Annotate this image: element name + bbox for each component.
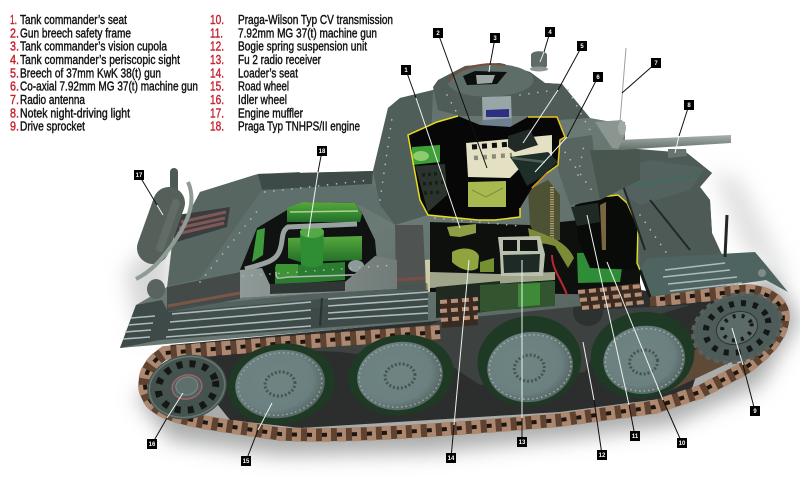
red cables bbox=[552, 255, 567, 295]
legend: parts list 10-18: 11. bbox=[210, 25, 223, 40]
transmission bbox=[577, 252, 622, 283]
legend: parts list 10-18: Engine muffler bbox=[238, 106, 303, 120]
callout 17 leader: 17 bbox=[136, 173, 143, 179]
callout 15 leader: 15 bbox=[243, 459, 250, 465]
olive bulkhead bbox=[528, 180, 560, 245]
legend: parts list 1-9: Co-axial 7.92mm MG 37(t) machine gun bbox=[20, 80, 198, 94]
tank: hull body bbox=[120, 48, 788, 348]
callout 18 leader bbox=[308, 146, 327, 237]
callout 3 leader bbox=[489, 33, 500, 72]
legend: parts list 1-9: 7. bbox=[10, 92, 19, 107]
callout 13 leader: 13 bbox=[519, 440, 526, 446]
legend: parts list 1-9: Gun breech safety frame bbox=[20, 26, 131, 40]
idler wheel bbox=[141, 347, 233, 427]
legend: parts list 1-9: 6. bbox=[10, 79, 19, 94]
callout 5 leader bbox=[523, 41, 587, 143]
tank: running gear bbox=[141, 283, 790, 435]
machine gun bbox=[571, 203, 600, 226]
callout 11 leader bbox=[587, 215, 640, 441]
radio receiver bbox=[498, 236, 545, 276]
post bbox=[425, 259, 436, 292]
ground shadow bbox=[125, 170, 800, 455]
front cutaway bbox=[571, 195, 640, 270]
legend: parts list 1-9: Tank commander’s seat bbox=[20, 13, 127, 27]
legend: parts list 1-9: Tank commander’s vision cupola bbox=[20, 40, 167, 54]
legend: parts list 10-18: 15. bbox=[210, 79, 224, 94]
exhaust pipes bbox=[245, 224, 357, 269]
callout 9 leader: 9 bbox=[753, 409, 757, 415]
callout 6 leader: 6 bbox=[596, 75, 600, 81]
turret interior cutaway bbox=[408, 116, 565, 220]
legend: parts list 1-9: 5. bbox=[10, 65, 19, 80]
drive sprocket bbox=[684, 283, 790, 373]
crew compartment interior bbox=[430, 180, 645, 328]
callout 18 leader: 18 bbox=[319, 149, 326, 155]
rear deck slope bbox=[168, 172, 300, 286]
road wheel 2 bbox=[343, 328, 459, 422]
rear lower wall bbox=[167, 272, 240, 312]
rivets bbox=[200, 90, 668, 282]
callout 10 leader: 10 bbox=[679, 441, 686, 447]
commander seat bbox=[447, 224, 476, 237]
legend: parts list 1-9: Drive sprocket bbox=[20, 120, 85, 134]
callout 10 leader bbox=[607, 262, 687, 448]
vision cupola bbox=[448, 64, 534, 97]
callout 11 leader: 11 bbox=[632, 434, 639, 440]
callout 7 leader: 7 bbox=[654, 61, 658, 67]
yellow cut line bbox=[408, 116, 520, 220]
front deck plates bbox=[615, 148, 788, 297]
legend: parts list 10-18: 18. bbox=[210, 119, 224, 134]
legend: parts list 1-9: Breech of 37mm KwK 38(t) gun bbox=[20, 66, 161, 80]
legend: parts list 10-18: Loader’s seat bbox=[238, 66, 298, 80]
legend: parts list 10-18: 13. bbox=[210, 52, 224, 67]
legend: parts list 10-18 bbox=[210, 12, 393, 134]
callout 9 leader bbox=[732, 328, 760, 416]
legend: parts list 10-18: 16. bbox=[210, 92, 224, 107]
legend: parts list 1-9: Notek night-driving light bbox=[20, 106, 130, 120]
callout 7 leader bbox=[622, 58, 661, 93]
road wheel 4 bbox=[585, 305, 700, 405]
legend: parts list 1-9: 8. bbox=[10, 105, 19, 120]
callout 14 leader bbox=[446, 260, 469, 463]
side armour plate bbox=[558, 135, 600, 205]
callout 1 leader bbox=[401, 65, 460, 228]
perforated panel bbox=[415, 164, 447, 212]
callout 12 leader: 12 bbox=[599, 453, 606, 459]
road wheel 3 bbox=[472, 309, 587, 413]
engine hatch plate bbox=[240, 256, 397, 298]
inner track mud bbox=[660, 345, 735, 393]
green cylinder bbox=[412, 145, 440, 165]
callout 4 leader: 4 bbox=[548, 30, 552, 36]
engine muffler bbox=[153, 172, 176, 248]
legend: parts list 10-18: Praga Typ TNHPS/II engine bbox=[238, 120, 360, 134]
sight box bbox=[482, 96, 512, 129]
engine bay bbox=[240, 202, 397, 298]
radio antenna bbox=[620, 48, 626, 122]
icon: return roller bbox=[573, 298, 603, 326]
seat back bbox=[468, 181, 506, 207]
rear track bottom run bbox=[145, 291, 783, 435]
legend: parts list 10-18: 14. bbox=[210, 65, 224, 80]
legend: parts list 10-18: 10. bbox=[210, 12, 224, 27]
lower hull bbox=[170, 290, 720, 428]
callout 15 leader bbox=[241, 403, 272, 466]
callout 2 leader bbox=[433, 28, 487, 168]
legend: parts list 1-9: Radio antenna bbox=[20, 93, 85, 107]
callout 16 leader: 16 bbox=[149, 442, 156, 448]
breech safety frame bbox=[466, 135, 552, 178]
turret bbox=[433, 51, 590, 129]
callout 13 leader bbox=[517, 260, 527, 447]
icon: notek night-driving light bbox=[668, 149, 687, 158]
icon: oil filter bbox=[300, 227, 324, 267]
legend: parts list 1-9: 2. bbox=[10, 25, 19, 40]
legend: parts list 10-18: 17. bbox=[210, 105, 224, 120]
tool cable bbox=[136, 182, 191, 279]
coaxial machine gun bbox=[510, 152, 558, 186]
loader seat bbox=[452, 249, 479, 270]
legend: parts list 1-9: 4. bbox=[10, 52, 19, 67]
rear grille bbox=[173, 207, 230, 243]
callout 17 leader bbox=[134, 170, 163, 215]
legend: parts list 1-9: Tank commander’s periscopic sight bbox=[20, 53, 180, 67]
legend: parts list 10-18: Road wheel bbox=[238, 80, 289, 94]
callout 4 leader bbox=[540, 27, 555, 62]
callout 14 leader: 14 bbox=[448, 456, 455, 462]
rear tail lamp bbox=[147, 279, 165, 299]
legend: parts list 1-9: 3. bbox=[10, 39, 19, 54]
left side fender plate bbox=[120, 290, 428, 348]
callout 8 leader: 8 bbox=[687, 103, 691, 109]
callout 8 leader bbox=[675, 100, 694, 153]
legend: parts list 10-18: Bogie spring suspension unit bbox=[238, 40, 367, 54]
callout 2 leader: 2 bbox=[436, 31, 440, 37]
left floor strip bbox=[430, 272, 555, 288]
main gun barrel bbox=[595, 120, 731, 150]
gun breech bbox=[508, 129, 538, 152]
superstructure side bbox=[373, 90, 433, 225]
callout 1 leader: 1 bbox=[404, 68, 408, 74]
callout 5 leader: 5 bbox=[580, 44, 584, 50]
legend: parts list 10-18: 12. bbox=[210, 39, 224, 54]
tan upper track links bbox=[578, 283, 644, 310]
legend: parts list 1-9 bbox=[10, 12, 198, 134]
legend: parts list 10-18: Fu 2 radio receiver bbox=[238, 53, 321, 67]
legend: parts list 10-18: Idler wheel bbox=[238, 93, 287, 107]
callout 12 leader bbox=[583, 342, 607, 460]
callout 16 leader bbox=[147, 393, 183, 449]
callout 6 leader bbox=[535, 72, 603, 172]
legend: parts list 1-9: 9. bbox=[10, 119, 19, 134]
road wheel 1 bbox=[222, 337, 340, 431]
legend: parts list 10-18: Praga-Wilson Typ CV transmission bbox=[238, 13, 393, 27]
callout 3 leader: 3 bbox=[493, 36, 497, 42]
legend: parts list 10-18: 7.92mm MG 37(t) machine gun bbox=[238, 26, 377, 40]
yellow cut line bbox=[600, 195, 640, 270]
periscopic sight bbox=[531, 51, 547, 70]
legend: parts list 1-9: 1. bbox=[10, 12, 17, 27]
